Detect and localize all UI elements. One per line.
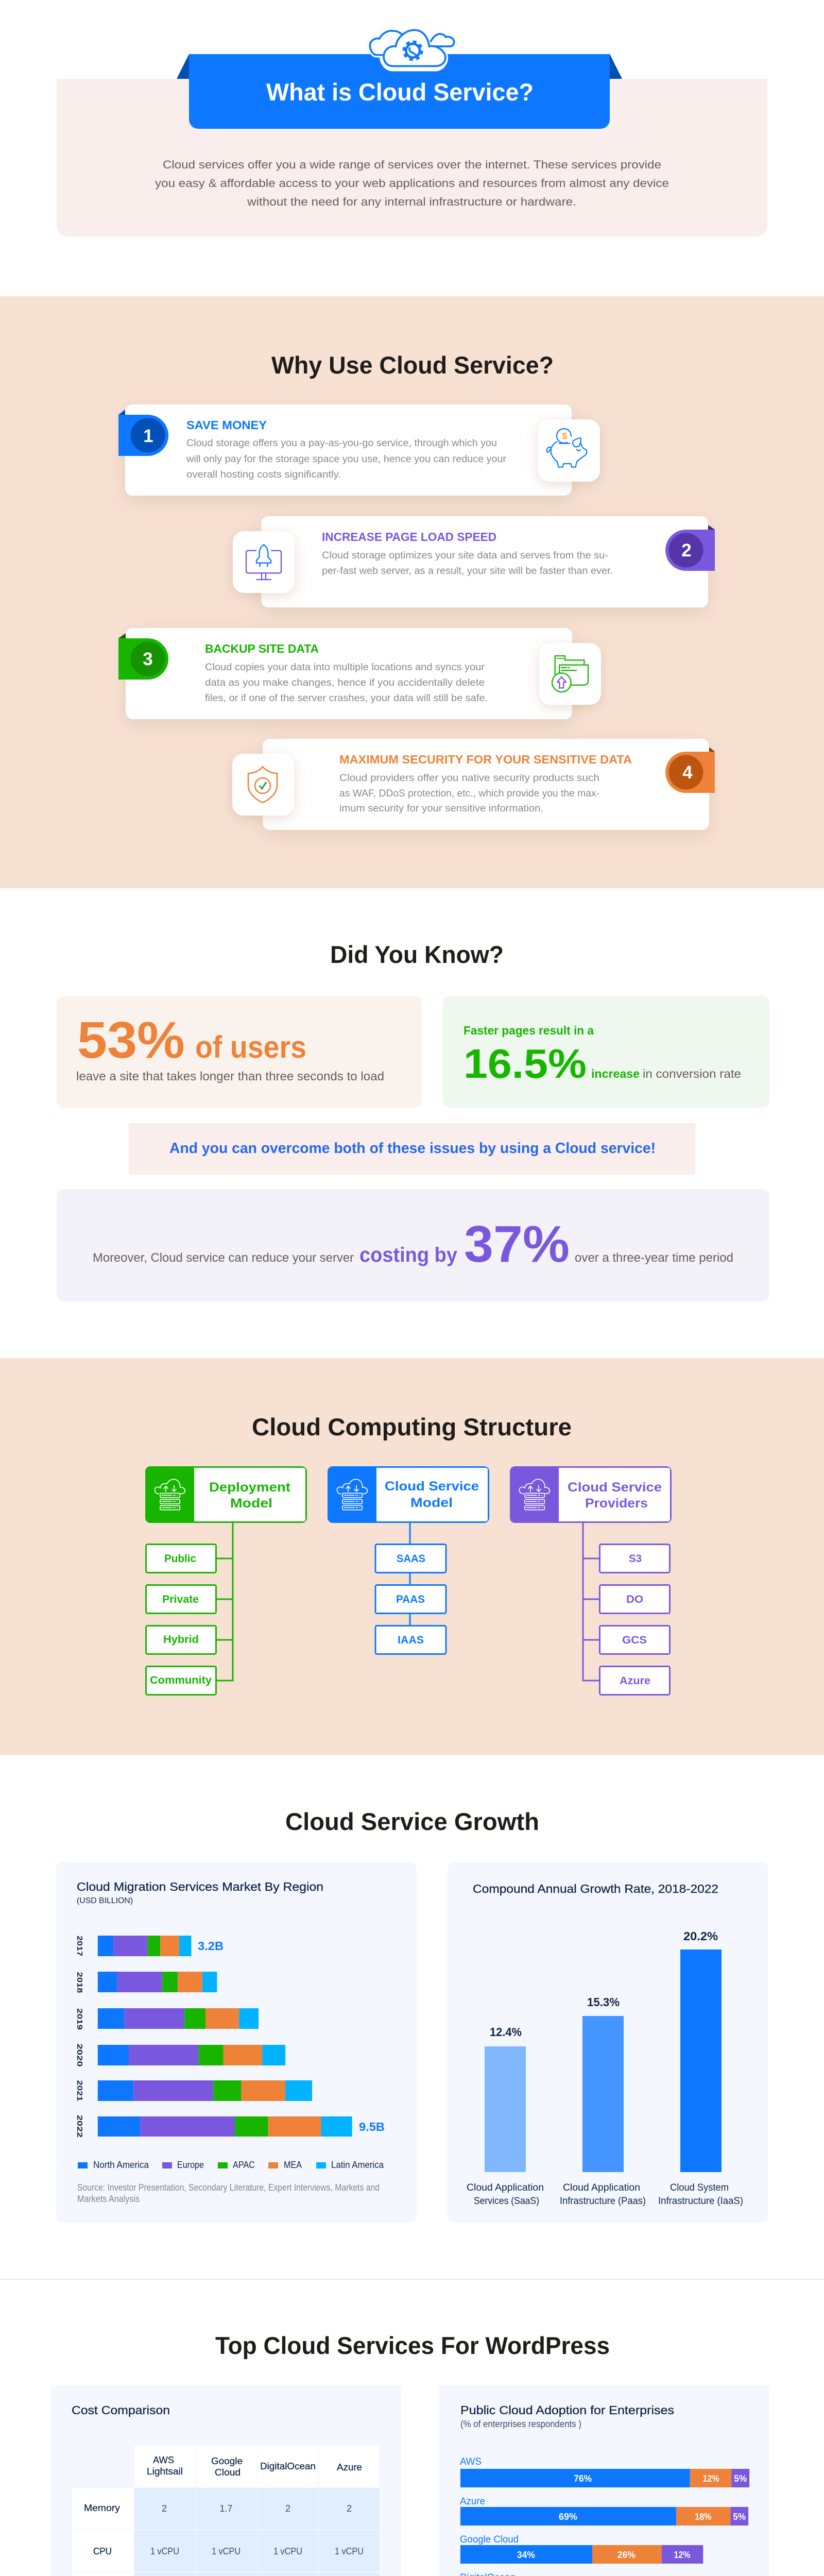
panel: compound annual growth rate	[448, 1862, 768, 2223]
section: top cloud services for wordpress	[51, 2332, 769, 2576]
item: community	[146, 1666, 216, 1695]
stacked bar chart: 2018	[75, 1972, 84, 1993]
heading: Top Cloud Services For WordPress	[215, 2332, 610, 2359]
item: saas	[375, 1545, 446, 1572]
card 3 body: data as you make changes, hence if you accidentally delete	[205, 677, 485, 688]
card 3 body: files, or if one of the server crashes, your data will still be safe.	[205, 693, 488, 704]
badge 3: 3	[143, 649, 153, 669]
panel: cost comparison	[51, 2385, 401, 2576]
row: AWS: AWS	[460, 2456, 482, 2467]
panel title: Public Cloud Adoption for Enterprises	[460, 2403, 674, 2417]
big number 16.5%: 16.5%	[464, 1041, 587, 1087]
bar: IaaS: 20.2%	[683, 1929, 718, 1943]
item: azure	[599, 1666, 670, 1695]
row: AWS: 76%	[574, 2473, 592, 2484]
bar: Paas: Cloud Application	[563, 2182, 640, 2193]
bar: SaaS: Cloud Application	[467, 2182, 544, 2193]
card 4: maximum security	[232, 739, 715, 830]
bar: SaaS	[467, 2025, 544, 2207]
item: s3	[599, 1545, 670, 1572]
title: What is Cloud Service?	[266, 78, 534, 106]
of users: of users	[195, 1030, 306, 1064]
table values	[141, 2503, 372, 2576]
item: hybrid: Hybrid	[163, 1634, 199, 1646]
header box	[510, 1466, 672, 1523]
table values: 2	[347, 2503, 352, 2514]
header box: Model	[230, 1496, 272, 1511]
legend: APAC	[233, 2160, 255, 2170]
card 1 body: Cloud storage offers you a pay-as-you-go service, through which you	[186, 438, 497, 449]
column: cloud service model	[328, 1466, 489, 1654]
heading: Cloud Computing Structure	[252, 1413, 572, 1440]
bar: Paas	[560, 1995, 646, 2207]
item: private	[146, 1585, 216, 1614]
legend: Europe	[177, 2160, 204, 2170]
stacked bar chart: 2022	[75, 2115, 84, 2138]
heading: Did You Know?	[330, 941, 504, 968]
row: Azure: 5%	[733, 2512, 746, 2522]
item: paas	[375, 1585, 446, 1614]
blue title ribbon	[189, 54, 610, 129]
column headers: Google	[211, 2456, 243, 2466]
card 4 title: MAXIMUM SECURITY FOR YOUR SENSITIVE DATA	[339, 753, 632, 766]
value label 3.2B: 3.2B	[198, 1939, 224, 1953]
icon: cloud server	[337, 1479, 367, 1510]
increase: increase	[591, 1067, 640, 1080]
column headers: Cloud	[215, 2467, 241, 2478]
icon: cloud with gear	[370, 30, 454, 69]
lead text: Moreover, Cloud service can reduce your server	[93, 1251, 354, 1265]
row: AWS: 12%	[703, 2473, 719, 2484]
big number 53%: 53%	[77, 1011, 185, 1069]
column: cloud service providers	[510, 1466, 672, 1695]
panel: market by region	[56, 1862, 417, 2223]
item: azure: Azure	[620, 1675, 650, 1687]
legend	[78, 2160, 384, 2170]
row: Google Cloud: 34%	[517, 2550, 535, 2560]
header box: Cloud Service	[385, 1479, 479, 1494]
column headers: DigitalOcean	[260, 2461, 316, 2471]
bar: SaaS: Services (SaaS)	[474, 2196, 539, 2207]
row headers: CPU	[93, 2546, 112, 2556]
item: gcs	[599, 1626, 670, 1654]
item: gcs: GCS	[622, 1634, 647, 1646]
panel subtitle: (% of enterprises respondents )	[460, 2419, 581, 2429]
badge 4	[665, 747, 715, 793]
value label 9.5B: 9.5B	[359, 2120, 385, 2133]
icon: cloud server	[154, 1479, 185, 1510]
row: Google Cloud	[460, 2534, 703, 2564]
source note: Source: Investor Presentation, Secondary Literature, Expert Interviews, Markets and	[77, 2182, 380, 2193]
intro panel background	[57, 79, 767, 236]
table values: 1 vCPU	[335, 2546, 364, 2556]
item: iaas	[375, 1626, 446, 1654]
row: Azure: 18%	[695, 2512, 711, 2522]
header box: Deployment	[209, 1480, 291, 1495]
callout banner: And you can overcome both of these issues by using a Cloud service!	[169, 1140, 656, 1157]
item: do: DO	[626, 1594, 643, 1605]
item: saas: SAAS	[397, 1553, 425, 1565]
section: what is cloud service	[57, 30, 767, 236]
item: hybrid	[146, 1626, 216, 1654]
column headers	[147, 2455, 362, 2478]
badge 2	[665, 525, 715, 571]
card background	[126, 628, 572, 719]
bar: IaaS: Infrastructure (IaaS)	[658, 2196, 743, 2207]
row: Azure: 69%	[559, 2512, 577, 2522]
item: private: Private	[162, 1594, 199, 1605]
table values: 1 vCPU	[150, 2546, 179, 2556]
icon: piggy bank	[538, 419, 600, 482]
card 2: page load speed	[233, 516, 715, 607]
card 2 body: per-fast web server, as a result, your site will be faster than ever.	[322, 566, 613, 577]
stacked bar chart: 2021	[75, 2080, 84, 2101]
badge 2: 2	[681, 540, 692, 561]
item: iaas: IAAS	[398, 1634, 424, 1646]
table values: 1.7	[219, 2503, 233, 2514]
row: Google Cloud: 26%	[617, 2550, 636, 2560]
bar: SaaS: 12.4%	[490, 2025, 522, 2039]
card background	[125, 404, 572, 496]
stacked bar chart: 2017	[75, 1936, 84, 1956]
card 4 body: Cloud providers offer you native security products such	[339, 773, 599, 784]
section background	[0, 296, 824, 888]
item: paas: PAAS	[396, 1594, 425, 1605]
stacked bar chart: 2019	[75, 2008, 84, 2030]
stat card: 53 percent	[57, 996, 422, 1108]
panel: public cloud adoption	[439, 2385, 769, 2576]
item: public: Public	[164, 1553, 196, 1565]
item: s3: S3	[629, 1553, 642, 1565]
column headers: Azure	[337, 2462, 362, 2472]
row headers	[84, 2503, 120, 2576]
ribbon fold left	[177, 54, 189, 79]
ribbon fold right	[610, 54, 622, 79]
table values: 1 vCPU	[212, 2546, 241, 2556]
badge 1: 1	[143, 426, 153, 446]
icon: piggy bank: $	[562, 431, 568, 441]
card 2 title: INCREASE PAGE LOAD SPEED	[322, 530, 496, 544]
card 3: backup site data	[118, 628, 601, 719]
card 3 title: BACKUP SITE DATA	[205, 642, 319, 655]
card 1 body: will only pay for the storage space you use, hence you can reduce your	[186, 454, 507, 465]
stat card: 16.5 percent	[443, 996, 769, 1108]
header box: Cloud Service	[568, 1480, 662, 1495]
card background	[263, 739, 709, 830]
intro paragraph: without the need for any internal infrastructure or hardware.	[247, 195, 576, 208]
legend: North America	[93, 2160, 149, 2170]
card 4 body: as WAF, DDoS protection, etc., which provide you the max-	[339, 788, 599, 799]
badge 1	[118, 410, 168, 456]
card 4 body: imum security for your sensitive information.	[339, 803, 543, 814]
header box	[145, 1466, 307, 1523]
card 1 body	[186, 438, 507, 480]
legend: Latin America	[331, 2160, 384, 2170]
header box: Model	[410, 1496, 453, 1510]
icon: shield	[232, 754, 294, 816]
stacked bar chart: 2020	[75, 2043, 84, 2067]
column headers: Lightsail	[147, 2466, 183, 2477]
card 3 body: Cloud copies your data into multiple locations and syncs your	[205, 662, 485, 673]
row: Azure: Azure	[460, 2496, 485, 2507]
card 3 body	[205, 662, 488, 704]
big number 37%: 37%	[464, 1215, 570, 1273]
icon: folder upload	[539, 643, 601, 705]
lead-in: Faster pages result in a	[464, 1024, 594, 1037]
section: why use cloud service	[0, 296, 824, 888]
card 2 body	[322, 550, 613, 577]
stacked bar chart	[75, 1936, 385, 2138]
section background	[0, 1358, 824, 1755]
chart title: Compound Annual Growth Rate, 2018-2022	[473, 1882, 718, 1895]
card 1 body: overall hosting costs significantly.	[186, 469, 341, 480]
card 4 body	[339, 773, 599, 814]
row: Google Cloud: 12%	[674, 2550, 690, 2560]
bar: Paas: Infrastructure (Paas)	[560, 2196, 646, 2207]
badge 4: 4	[682, 762, 693, 783]
row headers: Memory	[84, 2503, 120, 2513]
card 1 title: SAVE MONEY	[186, 418, 267, 432]
legend: MEA	[284, 2160, 302, 2170]
section: cloud computing structure	[0, 1358, 824, 1755]
panel title: Cost Comparison	[72, 2403, 170, 2417]
card 1: save money	[118, 404, 600, 496]
table values: 1 vCPU	[273, 2546, 302, 2556]
row: Azure	[460, 2496, 748, 2526]
heading: Why Use Cloud Service?	[271, 351, 554, 379]
row: Google Cloud: Google Cloud	[460, 2534, 519, 2545]
heading: Cloud Service Growth	[285, 1808, 539, 1835]
column headers: AWS	[153, 2455, 174, 2465]
section: cloud service growth	[56, 1808, 768, 2223]
source note	[77, 2182, 380, 2204]
costing by: costing by	[359, 1244, 458, 1266]
item: community: Community	[150, 1674, 212, 1686]
description: leave a site that takes longer than three seconds to load	[76, 1070, 384, 1083]
chart subtitle: (USD BILLION)	[77, 1896, 133, 1905]
comparison table	[72, 2446, 380, 2576]
trailing text: over a three-year time period	[575, 1251, 733, 1265]
card 2 body: Cloud storage optimizes your site data and serves from the su-	[322, 550, 608, 561]
callout banner	[129, 1123, 695, 1175]
badge 3	[118, 633, 168, 680]
section: did you know	[57, 941, 769, 1301]
table values: 2	[285, 2503, 290, 2514]
bar: IaaS	[658, 1929, 743, 2207]
connectors	[217, 1523, 233, 1681]
header box: Providers	[585, 1496, 648, 1511]
row: AWS: 5%	[734, 2473, 747, 2484]
connectors	[583, 1523, 599, 1681]
bar: IaaS: Cloud System	[670, 2182, 729, 2193]
icon: rocket on monitor	[233, 531, 295, 593]
item: do	[599, 1585, 670, 1614]
column: deployment model	[145, 1466, 307, 1695]
table values: 2	[162, 2503, 167, 2514]
connector	[409, 1523, 411, 1625]
intro paragraph	[155, 158, 669, 208]
source note: Markets Analysis	[77, 2194, 140, 2204]
header box	[328, 1466, 489, 1523]
intro paragraph: you easy & affordable access to your web applications and resources from almost any device	[155, 177, 669, 190]
chart title: Cloud Migration Services Market By Region	[77, 1880, 323, 1893]
icon: cloud server	[519, 1479, 550, 1510]
item: public	[146, 1545, 216, 1572]
intro paragraph: Cloud services offer you a wide range of services over the internet. These services provide	[163, 158, 661, 171]
conversion text: in conversion rate	[643, 1067, 741, 1080]
stat card: 37 percent	[57, 1189, 769, 1301]
card background	[261, 516, 708, 607]
bar: Paas: 15.3%	[587, 1995, 620, 2009]
row: AWS	[460, 2456, 749, 2487]
